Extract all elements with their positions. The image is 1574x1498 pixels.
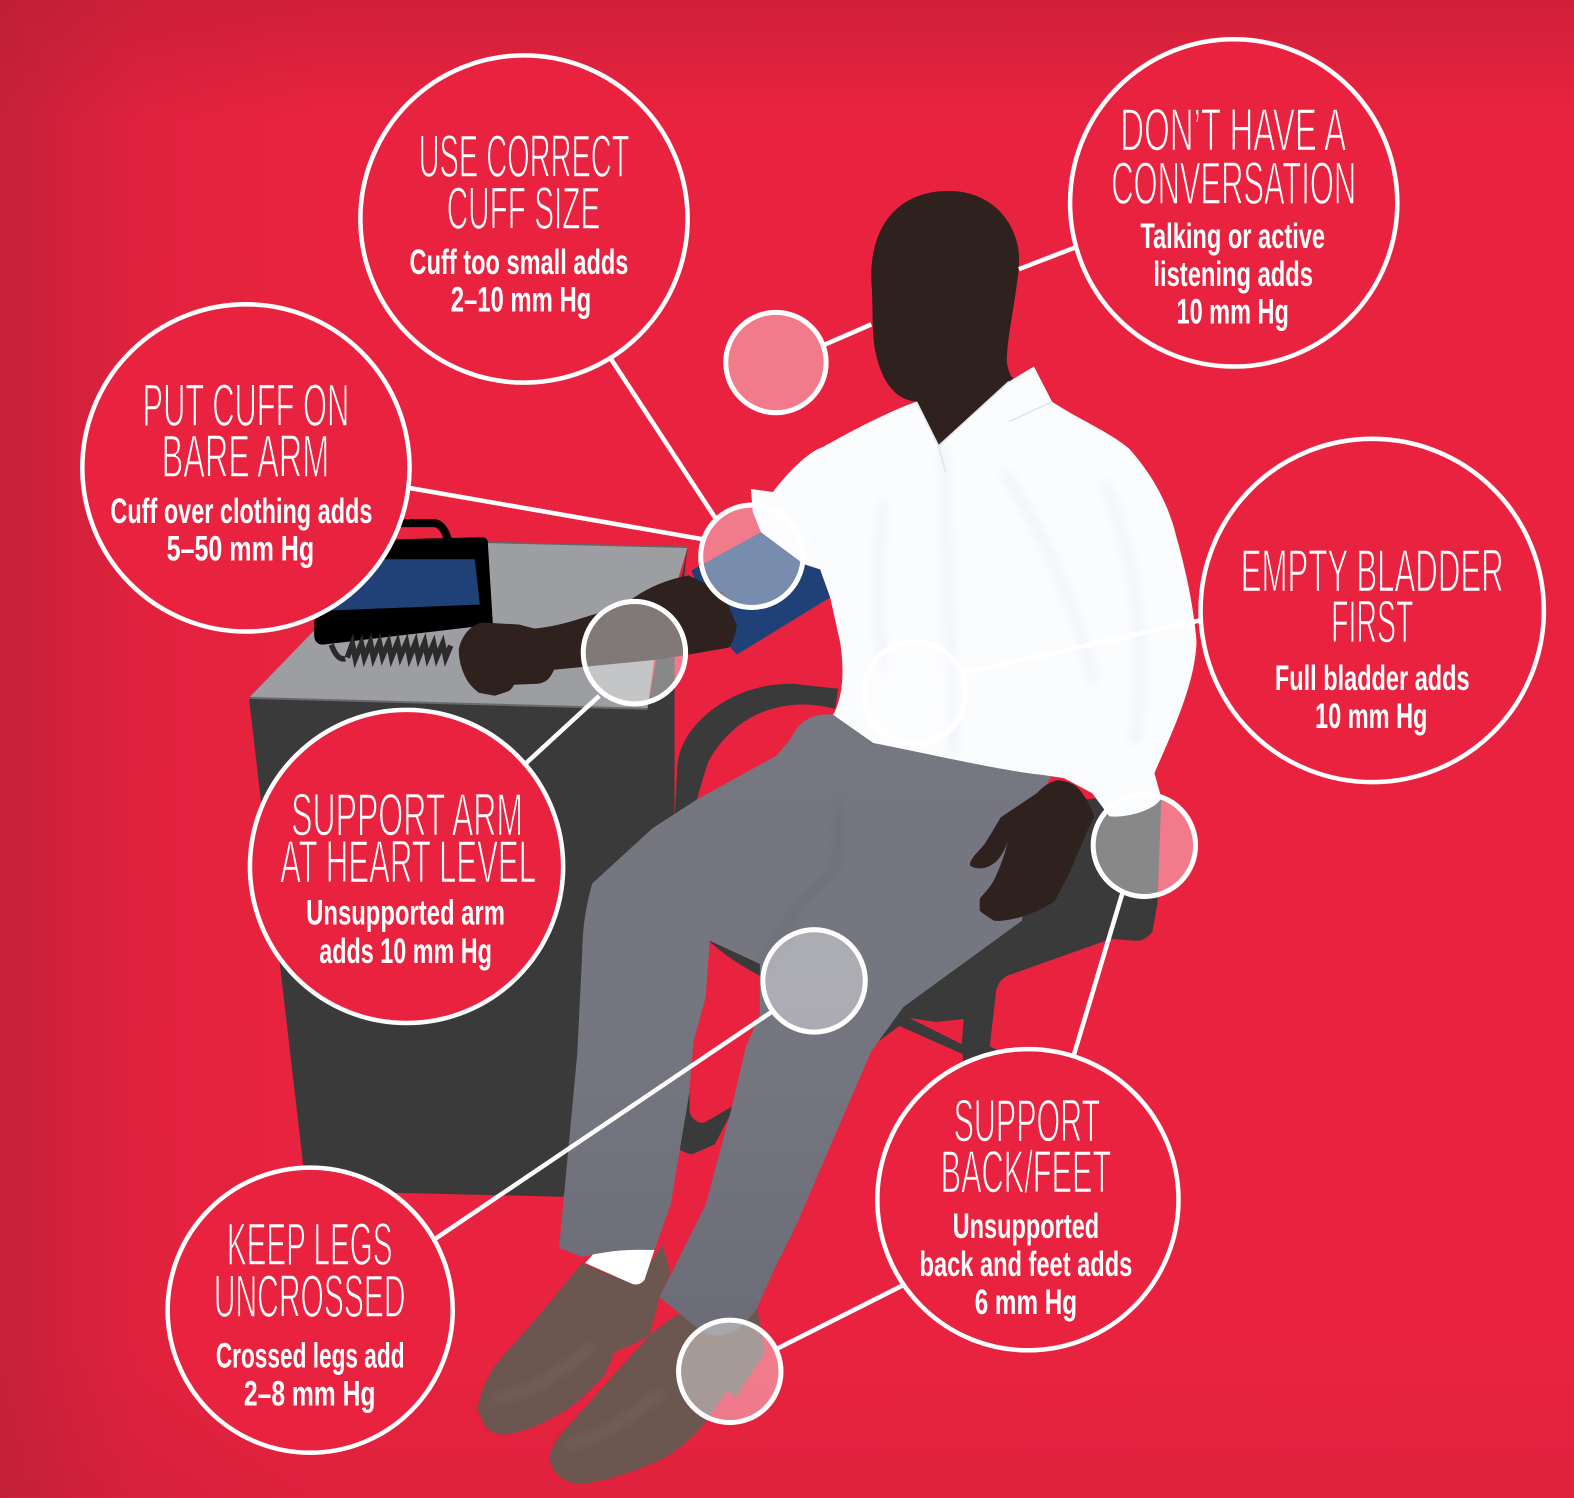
marker: feet support [679, 1320, 781, 1423]
callout: use correct cuff size: CUFF SIZE [447, 174, 600, 242]
callout: empty bladder first: 10 mm Hg [1315, 697, 1427, 736]
marker: back support [1093, 794, 1196, 897]
callout: support arm at heart level: SUPPORT ARM [291, 780, 523, 848]
forearm and hand [459, 575, 737, 696]
callout: put cuff on bare arm: 5–50 mm Hg [167, 529, 314, 568]
callout: put cuff on bare arm: BARE ARM [162, 422, 329, 490]
callout: put cuff on bare arm: PUT CUFF ON [143, 371, 349, 439]
callout: keep legs uncrossed: 2–8 mm Hg [244, 1375, 375, 1414]
chair [670, 684, 1161, 1155]
resting hand [970, 780, 1094, 921]
callout: don't have a conversation: 10 mm Hg [1176, 292, 1289, 331]
callout: support arm at heart level [250, 710, 563, 1023]
person [459, 191, 1197, 1484]
marker: cuff on bare arm [701, 505, 803, 607]
sock [585, 1250, 654, 1285]
callout: support back and feet [877, 1049, 1178, 1350]
callout: use correct cuff size: 2–10 mm Hg [451, 280, 591, 319]
leader lines [410, 247, 1200, 1348]
callout: keep legs uncrossed: KEEP LEGS [227, 1210, 392, 1278]
callout: support arm at heart level: Unsupported arm [306, 894, 505, 933]
callout: don't have a conversation [1070, 39, 1397, 367]
callout: support arm at heart level: adds 10 mm Hg [319, 932, 492, 971]
white shirt [751, 367, 1197, 817]
blood pressure cuff [692, 532, 830, 655]
head and neck [871, 191, 1019, 446]
trousers [559, 714, 1052, 1335]
callout: support back and feet: SUPPORT [954, 1086, 1100, 1154]
callout: support arm at heart level: AT HEART LEVEL [280, 828, 536, 896]
blood pressure monitor [314, 523, 493, 659]
marker: legs uncrossed [763, 930, 865, 1032]
callout: use correct cuff size [360, 55, 688, 383]
callout: empty bladder first: Full bladder adds [1275, 659, 1470, 698]
callout: don't have a conversation: DON’T HAVE A [1120, 96, 1347, 164]
callout: support back and feet: 6 mm Hg [975, 1283, 1077, 1322]
callout: support back and feet: Unsupported [953, 1207, 1099, 1246]
callout: don't have a conversation: Talking or active [1140, 217, 1325, 256]
callout: support back and feet: back and feet adds [920, 1245, 1132, 1284]
right shoe [549, 1305, 765, 1484]
callout: put cuff on bare arm [82, 304, 410, 632]
desk [249, 540, 688, 1197]
left shoe [478, 1245, 671, 1435]
callout: put cuff on bare arm: Cuff over clothing adds [110, 492, 372, 531]
callout: empty bladder first: FIRST [1331, 588, 1413, 656]
callout: don't have a conversation: listening adds [1153, 255, 1313, 294]
marker: arm support [583, 601, 686, 704]
callout: empty bladder first [1201, 439, 1544, 782]
callout: keep legs uncrossed: UNCROSSED [214, 1262, 406, 1330]
marker: bladder [863, 642, 966, 744]
callout: keep legs uncrossed [168, 1168, 453, 1453]
callout: use correct cuff size: USE CORRECT [419, 122, 629, 190]
marker: talking at mouth [726, 312, 826, 413]
callout: keep legs uncrossed: Crossed legs add [216, 1336, 405, 1375]
callout: use correct cuff size: Cuff too small adds [410, 243, 628, 282]
callout: support back and feet: BACK/FEET [941, 1138, 1111, 1206]
